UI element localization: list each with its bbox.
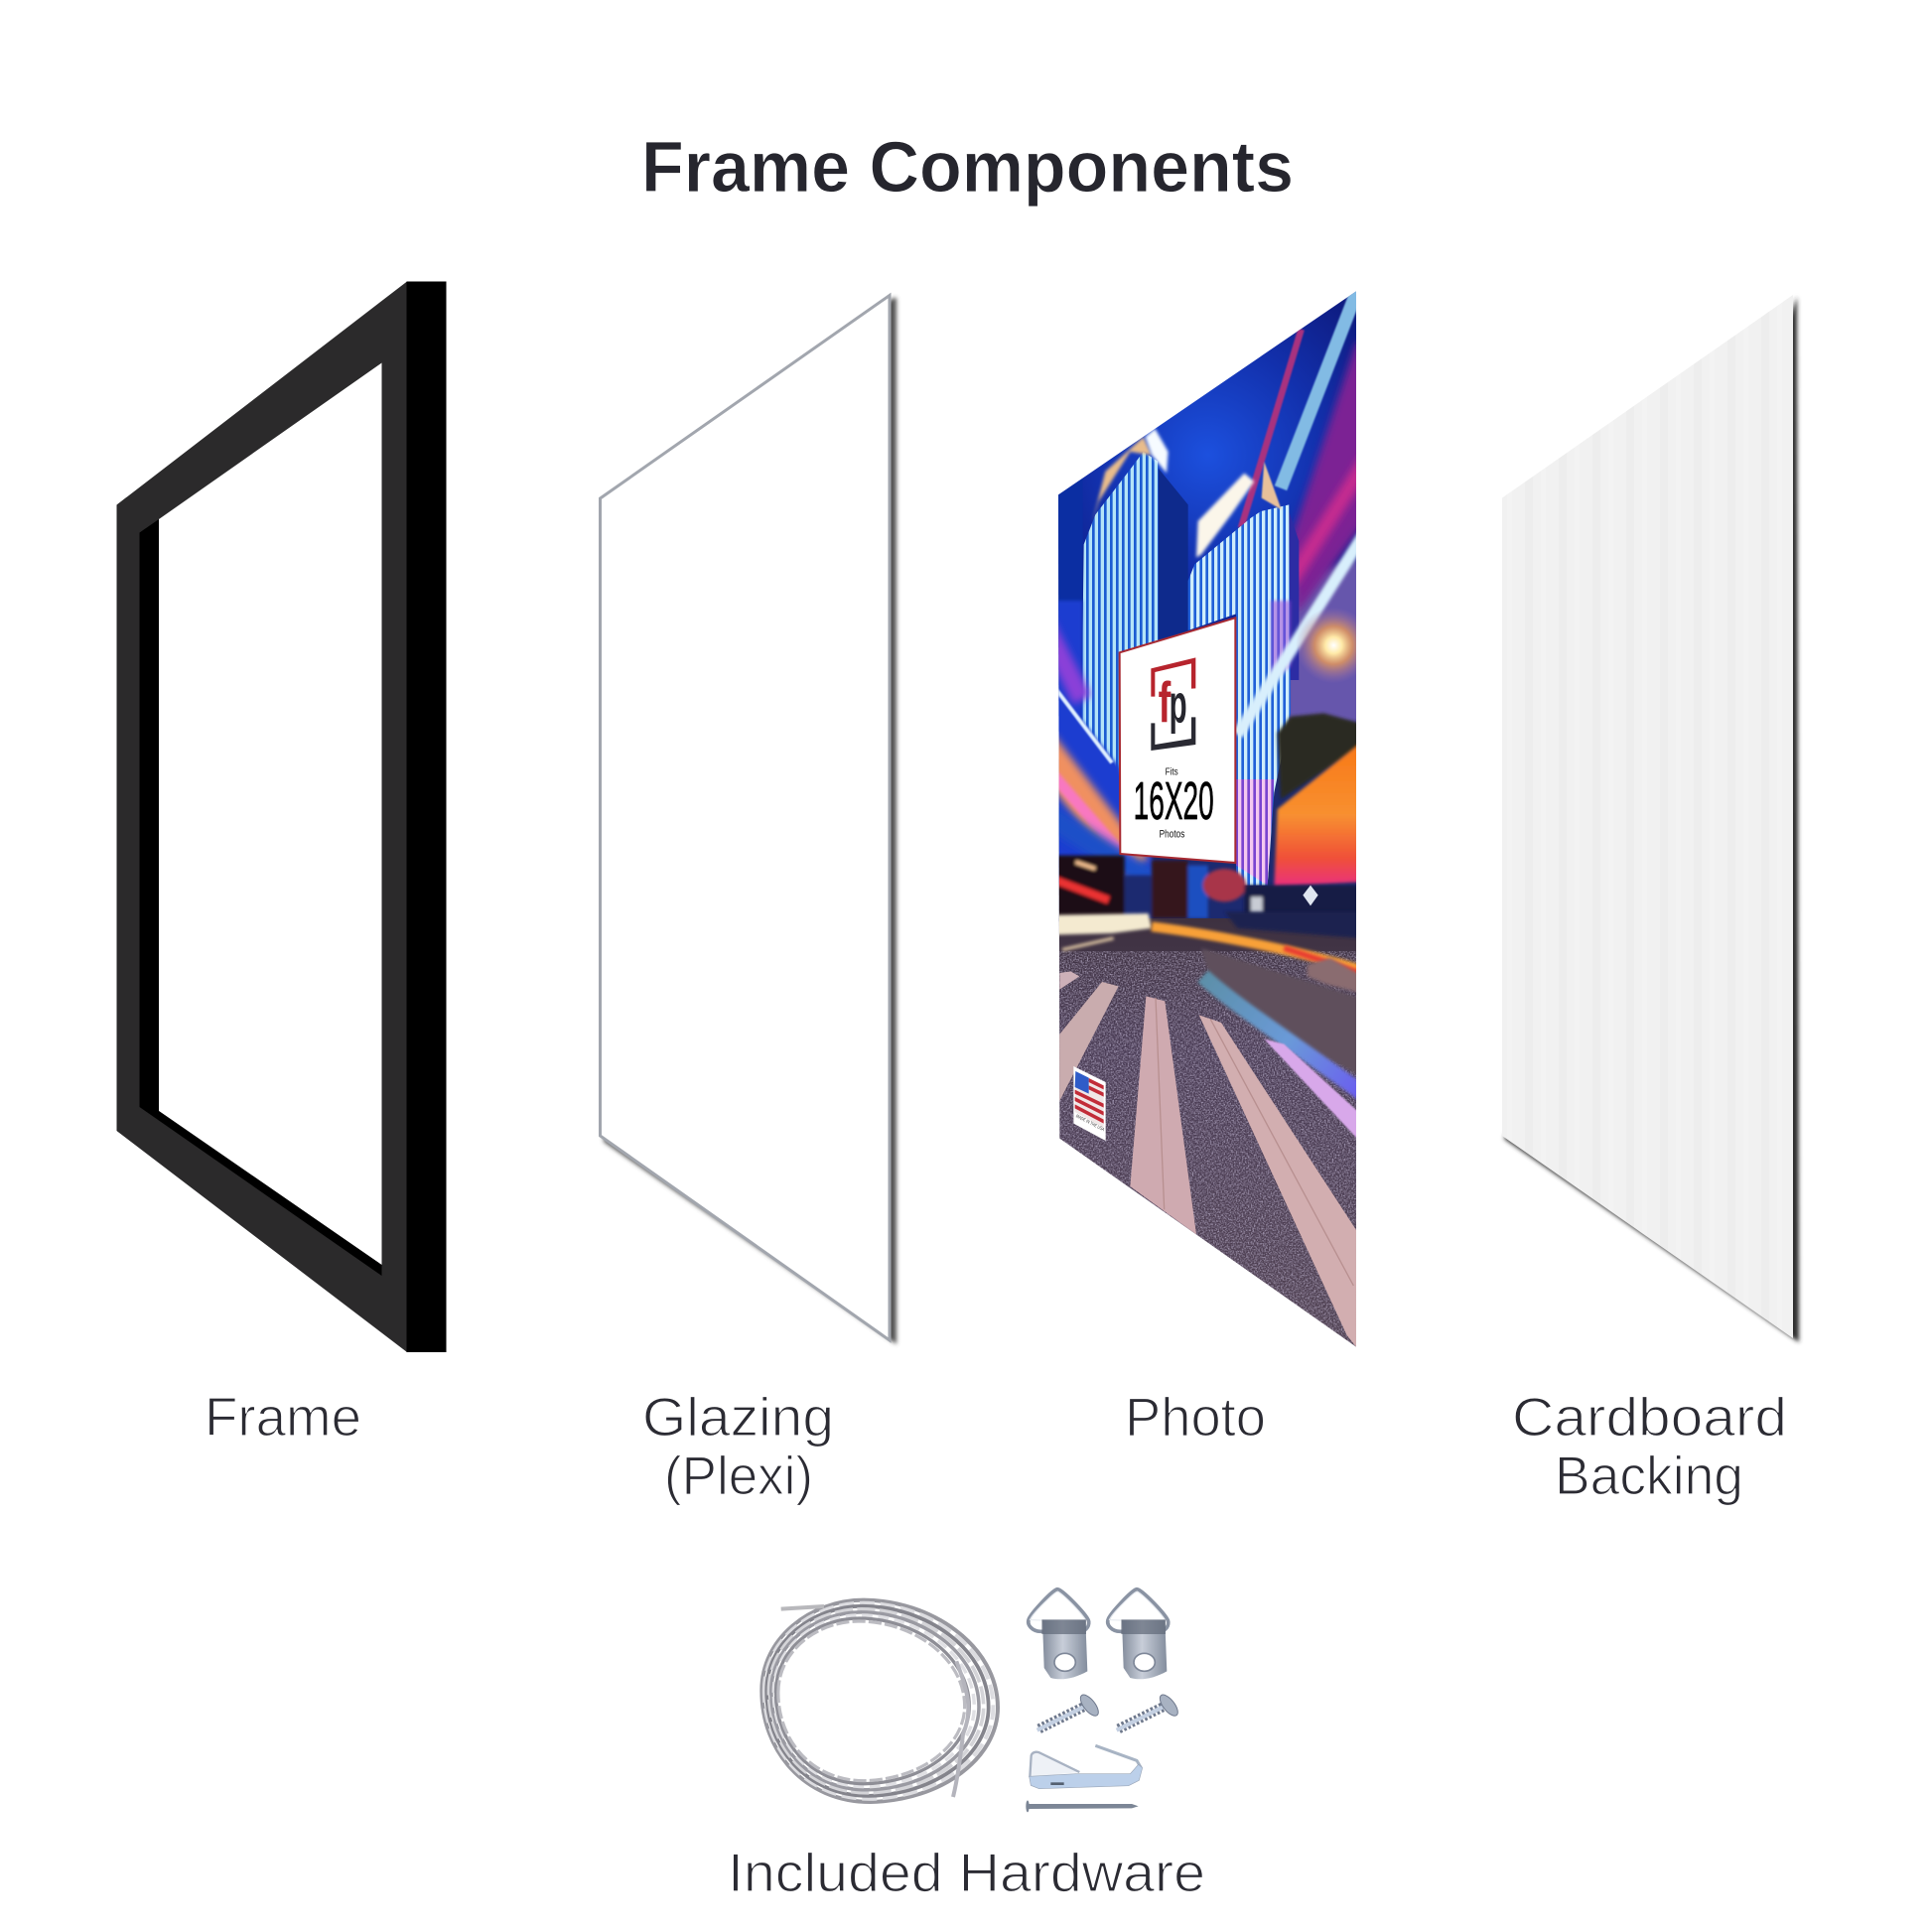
photo tree [1278, 713, 1360, 799]
panel: cardboard backing [1502, 295, 1799, 1342]
photo pale blue beam [1281, 283, 1360, 488]
d-ring hanger left [1029, 1589, 1089, 1679]
photo road [1055, 918, 1360, 1355]
photo flag badge [1073, 1066, 1106, 1141]
frame inner shadow edge [139, 519, 381, 1276]
photo white beam [1238, 524, 1370, 735]
photo tail lights [1152, 926, 1370, 973]
photo left light trails [1058, 600, 1155, 887]
photo asphalt speckle [1055, 951, 1360, 1355]
photo purple streaks [1293, 339, 1356, 615]
photo right building dark side [1289, 511, 1299, 680]
frame front face [117, 282, 407, 1352]
photo left dark column [1058, 479, 1083, 720]
cardboard shadow [1504, 297, 1799, 1342]
hanging wire coil [761, 1600, 998, 1802]
nail [1026, 1800, 1139, 1812]
photos text: Photos [1160, 829, 1185, 841]
panel: glazing [600, 296, 897, 1344]
photo road sign [1303, 886, 1318, 905]
size text: 16X20 [1134, 772, 1214, 831]
photo purple stripe [1264, 1039, 1360, 1142]
label: cardboard backing [1512, 1386, 1787, 1506]
picture hook [1030, 1745, 1143, 1789]
label: glazing [642, 1386, 834, 1506]
logo letter f: f [1159, 672, 1172, 736]
panel: photo [1058, 292, 1356, 1346]
photo left building glare [1145, 429, 1169, 474]
photo distant dark band [1224, 911, 1360, 938]
cardboard sheet [1502, 295, 1793, 1338]
photo right building lower pink [1236, 779, 1274, 886]
label: included hardware: Included Hardware [728, 1842, 1205, 1903]
photo streak low left [1062, 938, 1114, 950]
label: glazing: Glazing [642, 1386, 834, 1448]
photo left building dark side [1159, 469, 1188, 647]
screw right [1117, 1692, 1181, 1730]
photo lower base fill [1052, 747, 1370, 921]
photo right building [1188, 504, 1291, 886]
panel: frame [117, 282, 447, 1352]
label: glazing: (Plexi) [664, 1445, 813, 1506]
photo street level scene [1052, 856, 1363, 918]
logo letter p: p [1170, 673, 1187, 735]
label: frame: Frame [205, 1386, 361, 1448]
title: Frame Components [641, 128, 1294, 207]
photo blue road streak [1203, 976, 1370, 1099]
logo bracket dark [1151, 717, 1195, 751]
label: photo: Photo [1125, 1386, 1266, 1448]
photo star light [1298, 610, 1356, 681]
photo right building glowing roof [1196, 474, 1254, 558]
photo car [1308, 958, 1360, 993]
photo violet area behind star [1289, 557, 1356, 724]
fits text: Fits [1166, 767, 1178, 778]
d-ring hanger right [1108, 1589, 1169, 1679]
photo top light band left [1052, 913, 1152, 935]
photo size card [1120, 618, 1235, 863]
panel: included hardware [761, 1589, 1181, 1812]
glazing shadow [604, 298, 897, 1344]
photo crosswalk stripes [1055, 971, 1360, 1352]
photo pink beam [1241, 330, 1302, 528]
photo left building [1081, 452, 1159, 779]
label: cardboard backing: Cardboard [1512, 1386, 1787, 1448]
screw left [1037, 1692, 1102, 1730]
photo right crown [1262, 462, 1282, 509]
logo bracket red [1151, 657, 1195, 697]
photo right lane [1201, 948, 1360, 1075]
card panel [1120, 618, 1235, 863]
frame right side [407, 282, 447, 1352]
glazing sheet [600, 296, 890, 1340]
photo right building upper purple [1271, 601, 1291, 680]
label: cardboard backing: Backing [1555, 1445, 1743, 1506]
photo flag badge: MADE IN THE USA [1075, 1113, 1106, 1133]
photo sky [1052, 283, 1370, 747]
photo left building crown [1092, 437, 1152, 523]
photo orange light trails [1274, 743, 1360, 887]
